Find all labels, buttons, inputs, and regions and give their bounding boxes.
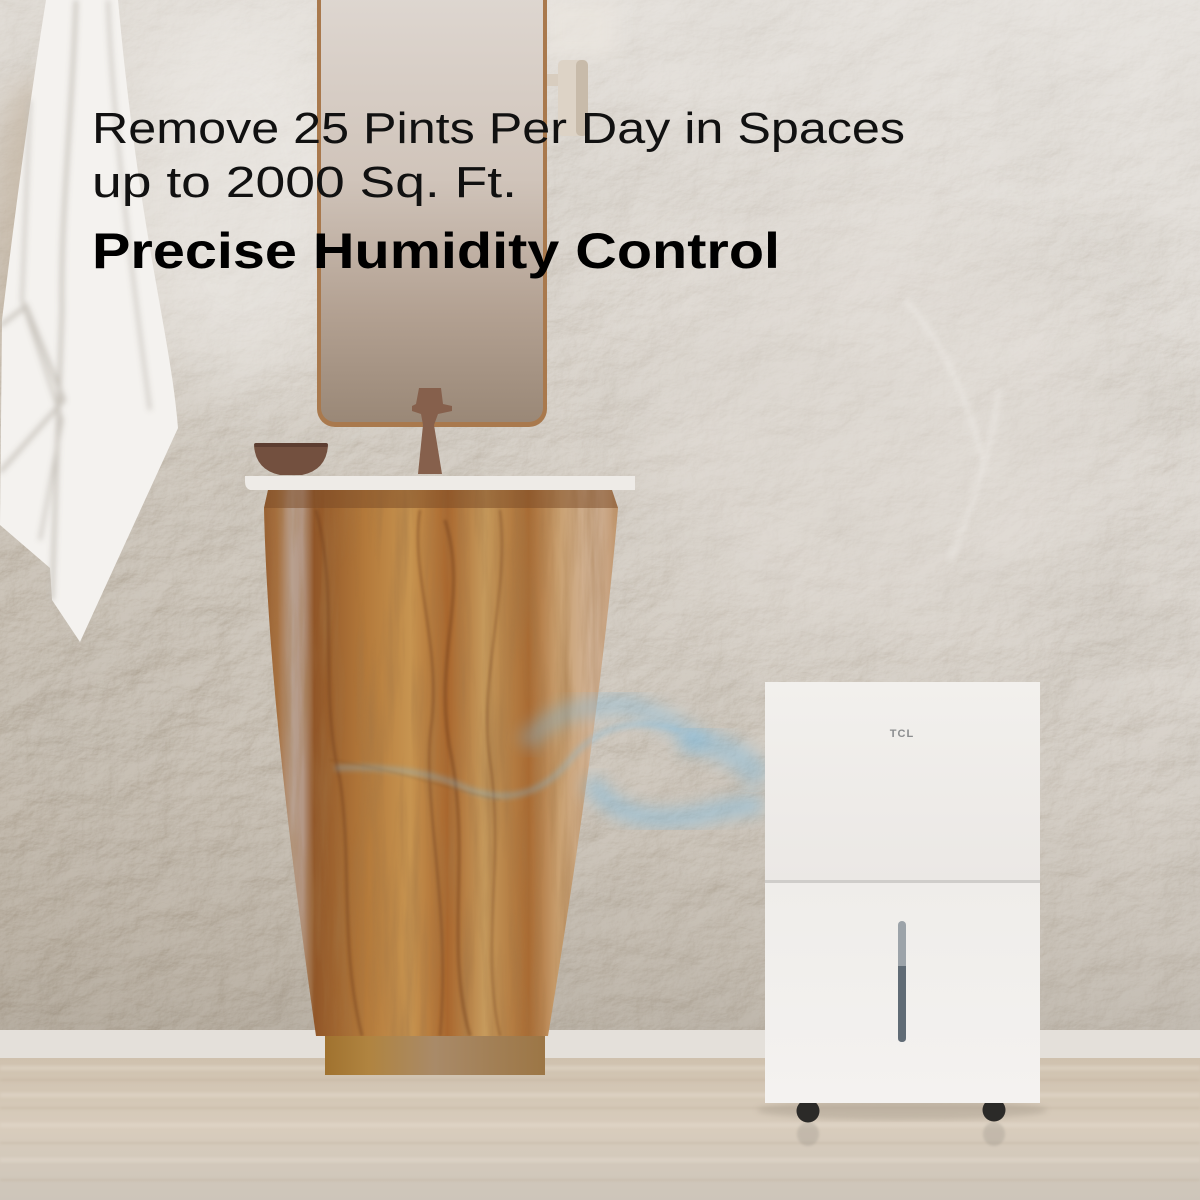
wooden vanity: [245, 476, 635, 1075]
headline: up to 2000 Sq. Ft.: [92, 158, 517, 207]
water level window: [898, 921, 906, 1042]
dehumidifier: [757, 682, 1047, 1146]
headline: [92, 104, 905, 279]
subheading: Precise Humidity Control: [92, 223, 780, 279]
wood grain lines: [316, 510, 502, 1036]
wooden floor: [0, 1058, 1200, 1200]
wheel reflections: [797, 1122, 1005, 1146]
baseboard: [0, 1030, 1200, 1058]
bowl: [254, 443, 328, 475]
headline: Remove 25 Pints Per Day in Spaces: [92, 104, 905, 153]
TCL logo: TCL: [890, 728, 914, 740]
floor shadow: [757, 1100, 1047, 1120]
mirror: [317, 0, 547, 427]
vanity base: [325, 1034, 545, 1075]
lower tank: [765, 883, 1040, 1103]
blue air stream: [335, 704, 762, 818]
vanity body: [255, 490, 632, 1040]
faucet: [412, 388, 452, 474]
vanity top band: [262, 490, 632, 508]
wall lamp: [546, 0, 616, 136]
towel: [0, 0, 178, 642]
upper housing: [765, 682, 1040, 881]
wheels: [796, 1098, 1006, 1122]
sink countertop: [245, 476, 635, 490]
